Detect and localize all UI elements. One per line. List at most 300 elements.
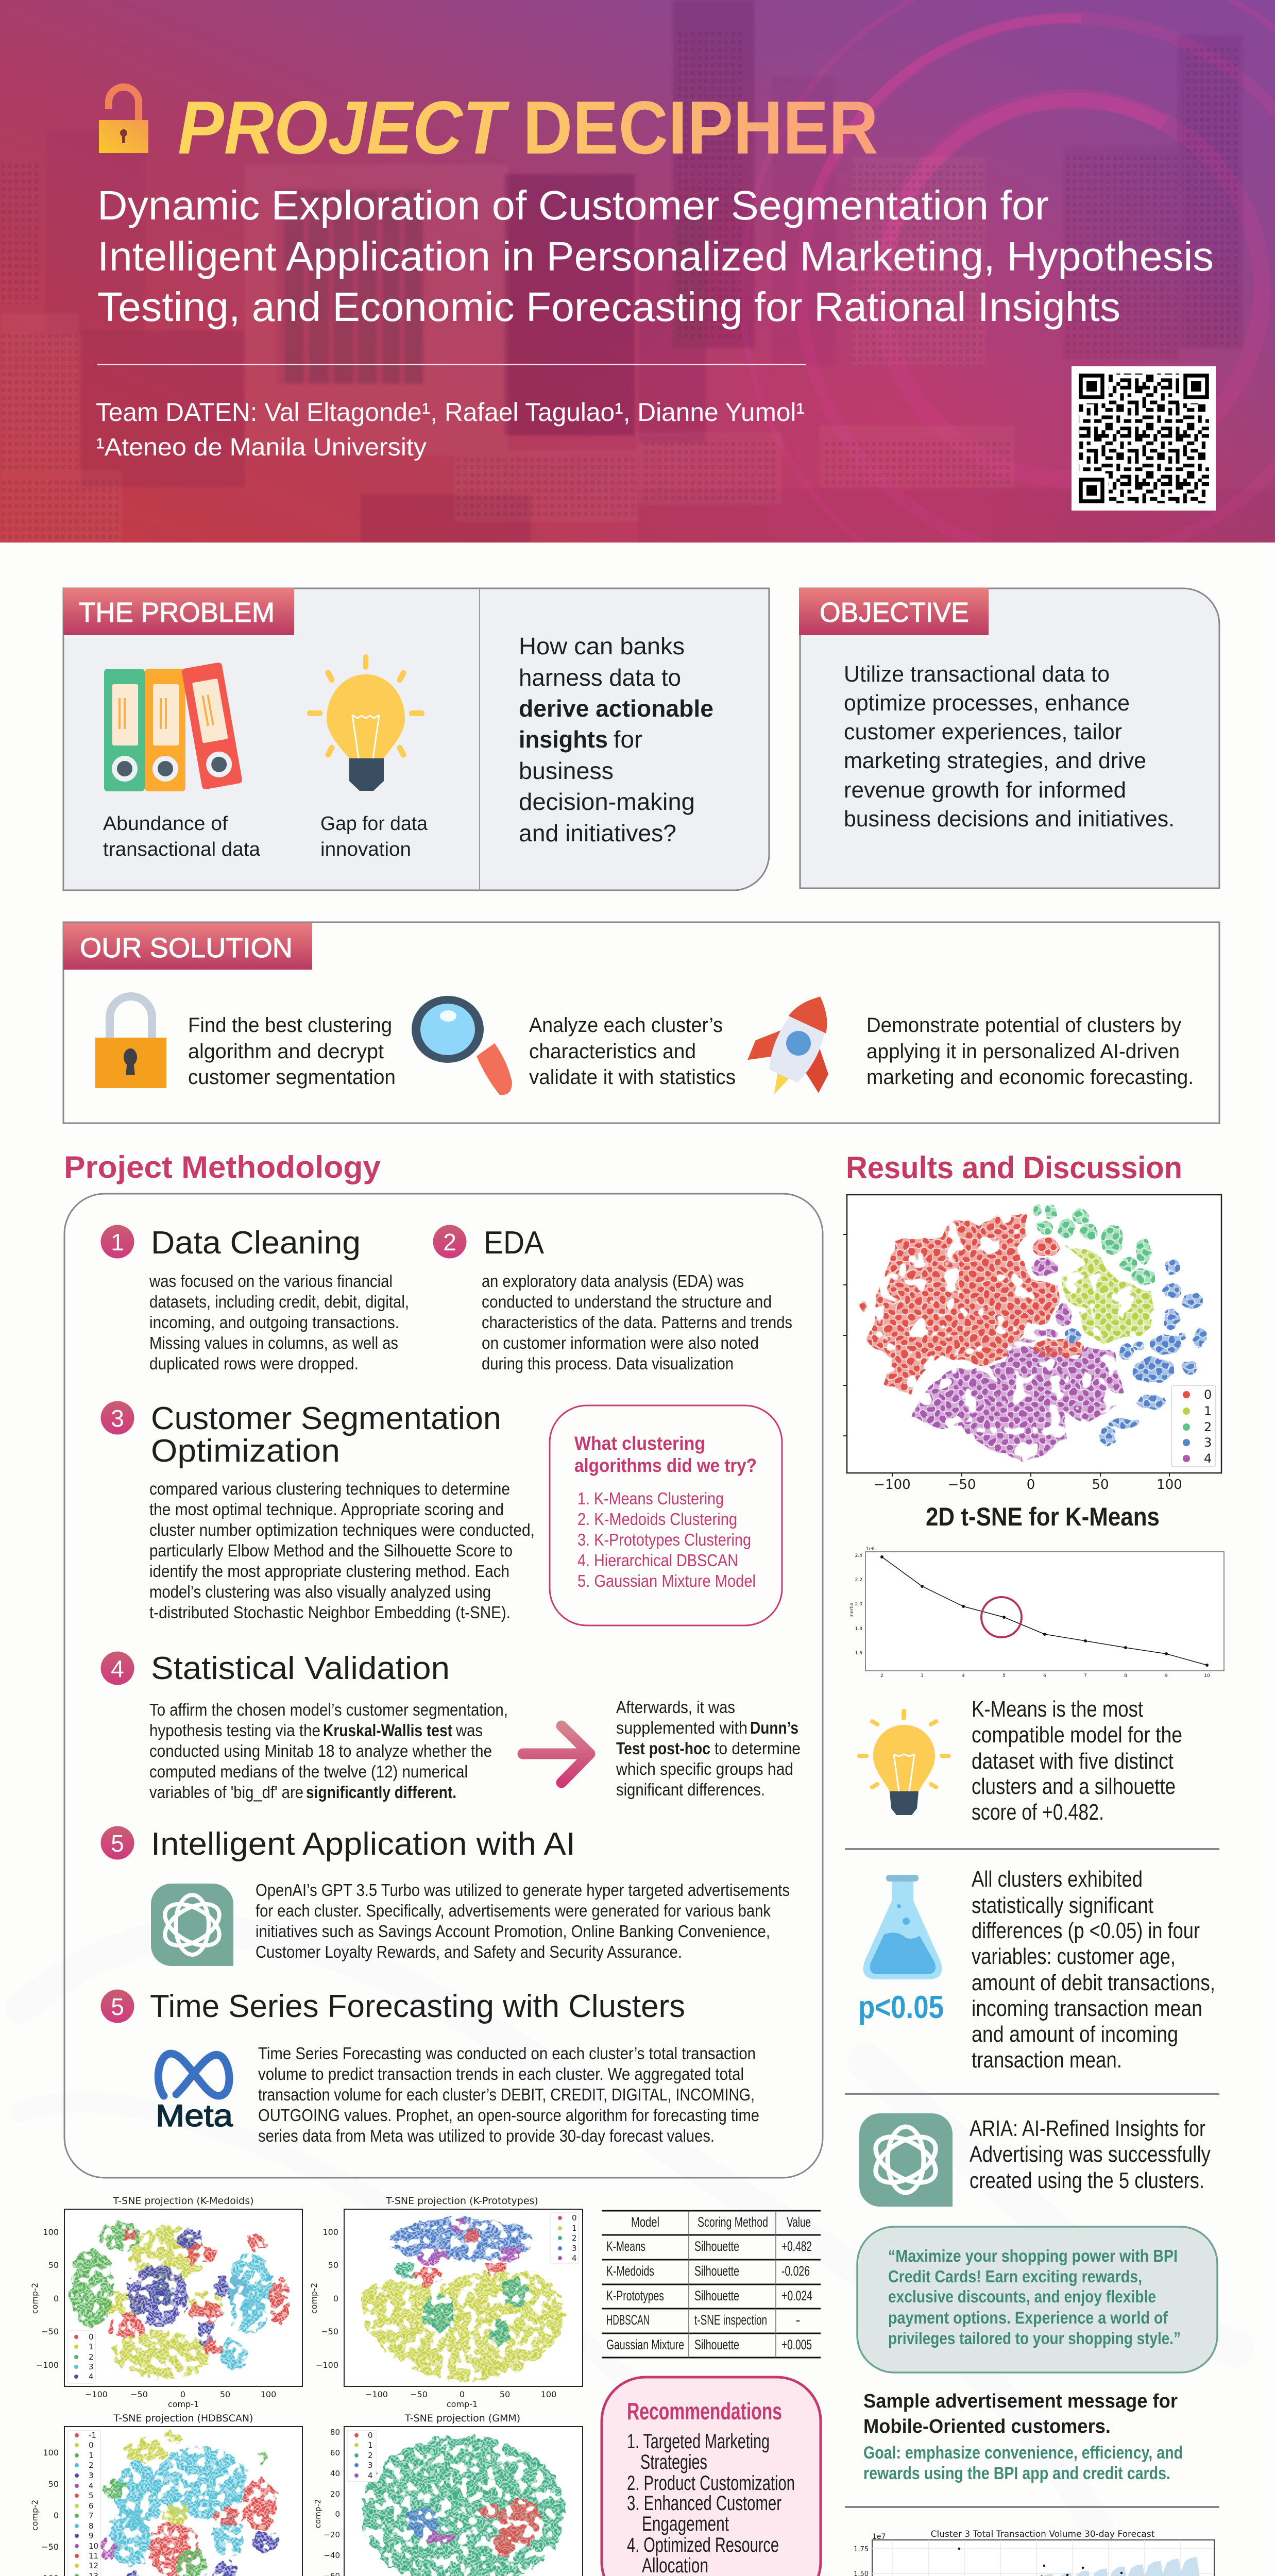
chart: t-SNE HDBSCAN: 0	[89, 2441, 94, 2450]
step 5b: time series forecasting: transaction volume for each cluster’s DEBIT, CREDIT, DIGITAL, INCOMING,	[258, 2085, 755, 2104]
chart: elbow plot: 4	[962, 1673, 965, 1679]
table: scoring: +0.005	[781, 2337, 812, 2352]
text: sample caption: Sample advertisement message for	[863, 2391, 1178, 2412]
chart: main t-SNE K-Means	[843, 1195, 1221, 1493]
chart: t-SNE HDBSCAN: T-SNE projection (HDBSCAN)	[113, 2413, 253, 2424]
chart: t-SNE K-Medoids: comp-2	[30, 2283, 40, 2314]
problem question: insights	[519, 726, 608, 753]
step 4: statistical validation: Statistical Validation	[151, 1651, 450, 1686]
step 3: customer segmentation optimization: the most optimal technique. Appropriate scoring and	[149, 1500, 504, 1519]
step 2: EDA: during this process. Data visualization	[482, 1354, 734, 1373]
callout: clustering algorithms: 5. Gaussian Mixture Model	[577, 1571, 756, 1590]
chart: t-SNE K-Medoids: T-SNE projection (K-Medoids)	[112, 2195, 254, 2207]
subtitle: Intelligent Application in Personalized Marketing, Hypothesis	[97, 233, 1214, 279]
problem question: derive actionable	[519, 695, 713, 722]
heading: results and discussion: Results and Discussion	[846, 1150, 1182, 1185]
post-hoc text	[616, 1698, 801, 1799]
chart: t-SNE K-Medoids: 0	[54, 2294, 59, 2303]
chart: t-SNE GMM: 3	[368, 2461, 373, 2470]
chart: t-SNE K-Prototypes: 50	[328, 2260, 338, 2270]
chart: main t-SNE K-Means: 1	[1204, 1404, 1212, 1418]
text: sample caption: Mobile-Oriented customers.	[863, 2416, 1111, 2437]
captions: Abundance of	[103, 813, 228, 835]
problem question	[519, 633, 713, 846]
chart: forecast: Cluster 3 Total Transaction Volume 30-day Forecast	[931, 2529, 1155, 2539]
step 1: data cleaning	[101, 1225, 409, 1373]
solution text 1: Find the best clustering	[188, 1014, 392, 1037]
chart: t-SNE K-Prototypes: −50	[410, 2389, 428, 2399]
panel: our solution	[63, 922, 1219, 1123]
title: DECIPHER	[523, 86, 878, 170]
tab heading: OUR SOLUTION	[80, 933, 293, 963]
chart: elbow plot: 10	[1204, 1673, 1210, 1679]
text: sample caption	[863, 2391, 1183, 2483]
subtitle: Dynamic Exploration of Customer Segmentation for	[97, 182, 1049, 228]
icon: magnifier	[412, 996, 512, 1095]
captions: Gap for data	[320, 813, 428, 835]
stat: p<0.05: p<0.05	[858, 1990, 944, 2025]
callout: sample advertisement: payment options. Experience a world of	[888, 2308, 1168, 2327]
chart: t-SNE K-Medoids: −50	[130, 2389, 148, 2399]
step 5b: time series forecasting: series data from Meta was utilized to provide 30-day forecast values.	[258, 2126, 715, 2145]
chart: main t-SNE K-Means: −50	[948, 1477, 976, 1493]
step 2: EDA: an exploratory data analysis (EDA) was	[482, 1272, 744, 1291]
chart: t-SNE K-Prototypes: 1	[572, 2224, 577, 2233]
panel: recommendations: Recommendations	[627, 2398, 782, 2425]
tab heading: OBJECTIVE	[820, 597, 969, 628]
step 4: statistical validation: significantly different.	[306, 1783, 456, 1802]
table: scoring: Silhouette	[694, 2337, 739, 2352]
solution text 2	[529, 1014, 736, 1089]
step 2: EDA: 2	[443, 1229, 456, 1256]
step 1: data cleaning: Data Cleaning	[151, 1225, 361, 1261]
chart: t-SNE K-Medoids: −50	[41, 2327, 59, 2336]
step 1: data cleaning: incoming, and outgoing transactions.	[149, 1313, 399, 1332]
step 5: intelligent application with AI: OpenAI’s GPT 3.5 Turbo was utilized to generate hyper targeted advertisements	[256, 1880, 790, 1900]
chart: t-SNE K-Prototypes: comp-2	[309, 2283, 319, 2314]
subtitle: Testing, and Economic Forecasting for Rational Insights	[97, 284, 1120, 330]
chart: elbow plot: 9	[1165, 1673, 1168, 1679]
chart: t-SNE K-Medoids: 50	[48, 2260, 59, 2270]
table: scoring: Silhouette	[694, 2263, 739, 2279]
problem question: harness data to	[519, 664, 681, 691]
chart: t-SNE GMM: −40	[324, 2551, 340, 2560]
chart: t-SNE K-Prototypes: 0	[572, 2213, 577, 2223]
chart: elbow plot: 5	[1002, 1673, 1006, 1679]
step 5b: time series forecasting	[101, 1989, 759, 2145]
callout: sample advertisement	[857, 2227, 1217, 2372]
captions	[103, 813, 428, 860]
chart: t-SNE HDBSCAN	[30, 2413, 302, 2576]
chart: elbow plot: inertia	[849, 1602, 855, 1618]
chart: main t-SNE K-Means: 3	[1204, 1435, 1212, 1450]
post-hoc text: supplemented with	[616, 1718, 747, 1737]
callout: sample advertisement: Credit Cards! Earn exciting rewards,	[888, 2267, 1142, 2286]
panel: recommendations: 1. Targeted Marketing	[627, 2430, 770, 2453]
solution text 1: algorithm and decrypt	[188, 1040, 384, 1063]
subtitle	[97, 182, 1214, 330]
text: statistical finding: variables: customer age,	[972, 1944, 1176, 1969]
tab heading	[63, 588, 294, 635]
chart: t-SNE K-Medoids: 0	[89, 2332, 94, 2342]
objective text	[844, 662, 1175, 832]
chart: t-SNE GMM	[313, 2413, 583, 2576]
step 2: EDA: characteristics of the data. Patterns and trends	[482, 1313, 792, 1332]
table: scoring: Model	[631, 2214, 659, 2230]
step 5: intelligent application with AI: Customer Loyalty Rewards, and Safety and Security Assurance.	[256, 1942, 682, 1961]
solution text 3: marketing and economic forecasting.	[866, 1066, 1194, 1089]
step 1: data cleaning: Missing values in columns, as well as	[149, 1333, 398, 1352]
panel: recommendations: 4. Optimized Resource	[627, 2534, 779, 2556]
solution text 3: Demonstrate potential of clusters by	[866, 1014, 1181, 1037]
chart: t-SNE GMM: −20	[324, 2530, 340, 2539]
chart: t-SNE K-Medoids	[30, 2195, 302, 2409]
chart: forecast	[848, 2529, 1214, 2576]
icon: Meta logo: Meta	[156, 2098, 233, 2133]
chart: t-SNE K-Prototypes: 4	[572, 2253, 577, 2263]
chart: t-SNE K-Prototypes: −50	[321, 2327, 338, 2336]
chart: t-SNE K-Prototypes: −100	[316, 2360, 338, 2370]
text: K-Means finding: score of +0.482.	[972, 1800, 1104, 1825]
chart: t-SNE HDBSCAN: 5	[89, 2491, 94, 2500]
text: statistical finding: amount of debit transactions,	[972, 1970, 1215, 1995]
tab heading	[63, 923, 312, 970]
icon: Meta logo	[156, 2054, 233, 2133]
step 4: statistical validation: 4	[111, 1655, 124, 1682]
text: K-Means finding: clusters and a silhouette	[972, 1774, 1176, 1799]
callout: clustering algorithms: 3. K-Prototypes Clustering	[577, 1530, 751, 1549]
panel: recommendations	[602, 2377, 821, 2576]
chart: main t-SNE K-Means: 4	[1204, 1451, 1212, 1466]
solution text 3: applying it in personalized AI-driven	[866, 1040, 1180, 1063]
chart: t-SNE K-Prototypes: −100	[365, 2389, 388, 2399]
chart: t-SNE K-Prototypes: 50	[500, 2389, 510, 2399]
step 3: customer segmentation optimization: Optimization	[151, 1433, 340, 1469]
chart: elbow plot: 2	[880, 1673, 883, 1679]
problem question: and initiatives?	[519, 820, 676, 846]
text: K-Means finding	[972, 1697, 1182, 1825]
text: sample caption: Goal: emphasize convenience, efficiency, and	[863, 2443, 1183, 2463]
chart: t-SNE K-Medoids: −100	[85, 2389, 108, 2399]
callout: sample advertisement: exclusive discounts, and enjoy flexible	[888, 2287, 1156, 2306]
callout: sample advertisement: “Maximize your shopping power with BPI	[888, 2246, 1178, 2265]
chart: t-SNE HDBSCAN: −50	[41, 2542, 59, 2552]
step 3: customer segmentation optimization: compared various clustering techniques to determine	[149, 1479, 510, 1498]
panel: methodology	[64, 1194, 823, 2178]
step 3: customer segmentation optimization: identify the most appropriate clustering method. Each	[149, 1562, 509, 1581]
chart: elbow plot: 2.2	[855, 1578, 862, 1583]
text: sample caption: rewards using the BPI app and credit cards.	[863, 2464, 1170, 2483]
chart: t-SNE HDBSCAN: 9	[89, 2531, 94, 2540]
table: scoring: Silhouette	[694, 2288, 739, 2303]
chart: t-SNE K-Prototypes: 0	[460, 2389, 465, 2399]
tab heading	[799, 588, 989, 635]
text: K-Means finding: compatible model for the	[972, 1722, 1182, 1748]
icon: binders	[104, 662, 243, 791]
chart: t-SNE K-Medoids: 3	[89, 2362, 94, 2371]
chart: t-SNE K-Prototypes: 100	[541, 2389, 556, 2399]
chart: t-SNE K-Prototypes: 0	[333, 2294, 338, 2303]
step 4: statistical validation: Kruskal-Wallis test	[323, 1721, 452, 1740]
chart: elbow plot: 2.0	[855, 1602, 862, 1607]
post-hoc text: Dunn’s	[750, 1718, 798, 1737]
callout: clustering algorithms	[550, 1405, 782, 1625]
chart: t-SNE GMM: 60	[330, 2448, 340, 2458]
chart: t-SNE K-Medoids: 0	[180, 2389, 185, 2399]
objective text: Utilize transactional data to	[844, 662, 1110, 687]
step 2: EDA: on customer information were also noted	[482, 1333, 759, 1352]
callout: sample advertisement: privileges tailored to your shopping style.”	[888, 2329, 1181, 2348]
step 1: data cleaning: datasets, including credit, debit, digital,	[149, 1292, 409, 1311]
hero banner	[0, 0, 1275, 543]
panel: objective	[799, 588, 1219, 888]
chart: elbow plot: 1.8	[855, 1626, 862, 1632]
post-hoc text: significant differences.	[616, 1780, 765, 1799]
table: scoring: t-SNE inspection	[694, 2312, 767, 2328]
icon: padlock	[95, 996, 166, 1088]
chart: t-SNE K-Medoids: 4	[89, 2372, 94, 2381]
chart: main t-SNE K-Means: 50	[1092, 1477, 1109, 1493]
icon: ChatGPT logo	[859, 2113, 953, 2207]
step 5: intelligent application with AI: initiatives such as Savings Account Promotion, Online Banking Convenience,	[256, 1922, 770, 1941]
chart: t-SNE HDBSCAN: 6	[89, 2501, 94, 2511]
text: ARIA: ARIA: AI-Refined Insights for	[970, 2116, 1205, 2141]
text: statistical finding: statistically significant	[972, 1893, 1153, 1918]
step 1: data cleaning: was focused on the various financial	[149, 1272, 393, 1291]
callout: clustering algorithms: What clustering	[574, 1433, 705, 1454]
solution text 1: customer segmentation	[188, 1066, 396, 1089]
chart: elbow plot: 6	[1043, 1673, 1046, 1679]
callout: clustering algorithms: 4. Hierarchical DBSCAN	[577, 1551, 738, 1570]
authors: Team DATEN: Val Eltagonde¹, Rafael Tagulao¹, Dianne Yumol¹	[96, 398, 805, 427]
chart: t-SNE GMM: 0	[335, 2510, 340, 2519]
text: statistical finding: All clusters exhibited	[972, 1867, 1143, 1892]
chart: main t-SNE K-Means: 2	[1204, 1420, 1212, 1434]
step 4: statistical validation: was	[455, 1721, 483, 1740]
title: PROJECT	[178, 86, 510, 170]
caption: 2D t-SNE: 2D t-SNE for K-Means	[926, 1502, 1160, 1531]
text: ARIA	[970, 2116, 1211, 2193]
chart: t-SNE GMM: 20	[330, 2489, 340, 2499]
icon: open padlock	[99, 87, 148, 153]
panel: the problem	[63, 587, 769, 890]
QR code	[1072, 366, 1216, 511]
solution text 2: characteristics and	[529, 1040, 696, 1063]
icon: flask	[863, 1875, 942, 1979]
step 5: intelligent application with AI: Intelligent Application with AI	[151, 1826, 575, 1862]
chart: t-SNE HDBSCAN: 0	[54, 2511, 59, 2520]
post-hoc text: Afterwards, it was	[616, 1698, 735, 1717]
step 4: statistical validation: conducted using Minitab 18 to analyze whether the	[149, 1741, 492, 1760]
step 3: customer segmentation optimization: 3	[111, 1405, 124, 1432]
chart: elbow plot: 1e6	[866, 1547, 875, 1552]
authors	[96, 398, 805, 461]
text: K-Means finding: dataset with five distinct	[972, 1749, 1174, 1774]
step 4: statistical validation	[101, 1651, 508, 1802]
chart: t-SNE GMM: 40	[330, 2469, 340, 2478]
chart: t-SNE GMM: 2	[368, 2451, 373, 2460]
step 5b: time series forecasting: 5	[111, 1993, 124, 2020]
chart: t-SNE K-Prototypes: comp-1	[447, 2399, 478, 2409]
chart: t-SNE GMM: 0	[368, 2431, 373, 2440]
solution text 3	[866, 1014, 1194, 1089]
solution text 1	[188, 1014, 396, 1089]
objective text: customer experiences, tailor	[844, 719, 1122, 744]
step 5: intelligent application with AI: 5	[111, 1830, 124, 1857]
step 2: EDA: conducted to understand the structure and	[482, 1292, 772, 1311]
text: statistical finding: incoming transaction mean	[972, 1996, 1202, 2021]
chart: t-SNE HDBSCAN: 1	[89, 2451, 94, 2460]
chart: main t-SNE K-Means: −100	[874, 1477, 911, 1493]
table: scoring	[602, 2211, 821, 2358]
chart: t-SNE GMM: 1	[368, 2441, 373, 2450]
panel: recommendations: Strategies	[640, 2451, 707, 2473]
chart: t-SNE HDBSCAN: 2	[89, 2461, 94, 2470]
table: scoring: Scoring Method	[698, 2214, 768, 2230]
solution text 2: validate it with statistics	[529, 1066, 736, 1089]
text: ARIA: Advertising was successfully	[970, 2142, 1211, 2167]
table: scoring: +0.482	[781, 2239, 812, 2254]
tab heading: THE PROBLEM	[79, 597, 275, 628]
table: scoring: K-Medoids	[606, 2263, 654, 2279]
table: scoring: -	[795, 2312, 801, 2328]
objective text: optimize processes, enhance	[844, 690, 1130, 716]
chart: main t-SNE K-Means: 100	[1157, 1477, 1182, 1493]
chart: elbow plot: 3	[921, 1673, 924, 1679]
text: K-Means finding: K-Means is the most	[972, 1697, 1143, 1722]
objective text: revenue growth for informed	[844, 777, 1126, 803]
table: scoring: Value	[787, 2214, 811, 2230]
text: statistical finding: differences (p <0.05) in four	[972, 1918, 1200, 1943]
post-hoc text: which specific groups had	[616, 1759, 793, 1778]
step 3: customer segmentation optimization	[101, 1401, 535, 1622]
title	[179, 101, 877, 155]
problem question: How can banks	[519, 633, 685, 659]
chart: t-SNE GMM: 80	[330, 2428, 340, 2437]
chart: t-SNE HDBSCAN: comp-2	[30, 2500, 40, 2531]
chart: t-SNE K-Medoids: −100	[36, 2360, 59, 2370]
step 5: intelligent application with AI	[101, 1826, 790, 1966]
step 5b: time series forecasting: Time Series Forecasting with Clusters	[150, 1989, 685, 2024]
step 2: EDA	[433, 1225, 792, 1373]
table: scoring: Silhouette	[694, 2239, 739, 2254]
chart: t-SNE HDBSCAN: 8	[89, 2521, 94, 2531]
step 1: data cleaning: 1	[111, 1229, 124, 1256]
step 1: data cleaning: duplicated rows were dropped.	[149, 1354, 359, 1373]
chart: elbow plot: 8	[1124, 1673, 1127, 1679]
step 3: customer segmentation optimization: cluster number optimization techniques were conducted,	[149, 1520, 535, 1539]
callout: clustering algorithms: 2. K-Medoids Clustering	[577, 1510, 737, 1529]
chart: t-SNE HDBSCAN: 4	[89, 2481, 94, 2490]
step 3: customer segmentation optimization: t-distributed Stochastic Neighbor Embedding (t-SNE).	[149, 1603, 511, 1622]
chart: t-SNE HDBSCAN: 10	[89, 2541, 98, 2551]
text: ARIA: created using the 5 clusters.	[970, 2168, 1204, 2193]
captions: innovation	[320, 839, 411, 860]
chart: t-SNE K-Medoids: 1	[89, 2342, 94, 2351]
post-hoc text: Test post-hoc	[616, 1739, 710, 1758]
chart: elbow plot: 7	[1084, 1673, 1087, 1679]
chart: t-SNE HDBSCAN: 11	[89, 2551, 98, 2561]
chart: elbow plot	[849, 1547, 1224, 1679]
chart: t-SNE K-Prototypes: T-SNE projection (K-Prototypes)	[385, 2195, 538, 2207]
icon: light bulb	[857, 1709, 951, 1815]
step 4: statistical validation: computed medians of the twelve (12) numerical	[149, 1762, 468, 1781]
chart: t-SNE GMM: comp-2	[313, 2499, 322, 2528]
icon: ChatGPT logo	[151, 1884, 233, 1966]
chart: t-SNE K-Prototypes: 3	[572, 2244, 577, 2253]
chart: t-SNE HDBSCAN: -1	[89, 2431, 96, 2440]
chart: t-SNE HDBSCAN: 3	[89, 2471, 94, 2480]
panel: recommendations: Engagement	[642, 2513, 729, 2535]
problem question: decision-making	[519, 788, 695, 815]
problem question: for	[614, 726, 642, 753]
objective text: business decisions and initiatives.	[844, 806, 1175, 832]
text: statistical finding: transaction mean.	[972, 2047, 1122, 2073]
chart: t-SNE HDBSCAN: 12	[89, 2561, 98, 2570]
chart: t-SNE K-Medoids: comp-1	[168, 2399, 199, 2409]
chart: t-SNE K-Medoids: 100	[43, 2227, 59, 2237]
icon: light bulb	[307, 654, 424, 791]
arrow	[523, 1726, 590, 1783]
problem question: business	[519, 757, 614, 784]
table: scoring: +0.024	[781, 2288, 812, 2303]
callout: clustering algorithms: algorithms did we try?	[574, 1455, 757, 1476]
chart: t-SNE HDBSCAN: 50	[48, 2479, 59, 2489]
chart: forecast: 1e7	[872, 2533, 886, 2541]
solution text 2: Analyze each cluster’s	[529, 1014, 723, 1037]
chart: t-SNE GMM: 4	[368, 2471, 373, 2480]
table: scoring: K-Means	[606, 2239, 645, 2254]
chart: t-SNE HDBSCAN: 7	[89, 2511, 94, 2520]
chart: t-SNE K-Medoids: 2	[89, 2352, 94, 2362]
table: scoring: Gaussian Mixture	[606, 2337, 684, 2352]
captions: transactional data	[103, 839, 261, 860]
chart: t-SNE K-Prototypes: 2	[572, 2233, 577, 2243]
chart: t-SNE K-Medoids: 100	[261, 2389, 276, 2399]
text: statistical finding	[972, 1867, 1215, 2073]
chart: main t-SNE K-Means: 0	[1204, 1387, 1212, 1402]
step 5: intelligent application with AI: for each cluster. Specifically, advertisements were generated for various bank	[256, 1901, 771, 1920]
panel: recommendations: 2. Product Customization	[627, 2472, 795, 2495]
step 5b: time series forecasting: volume to predict transaction trends in each cluster. We aggregated total	[258, 2064, 744, 2083]
step 4: statistical validation: hypothesis testing via the	[149, 1721, 320, 1740]
icon: rocket	[738, 979, 857, 1112]
chart: elbow plot: 1.6	[855, 1651, 862, 1656]
chart: t-SNE K-Medoids: 50	[220, 2389, 230, 2399]
step 5b: time series forecasting: Time Series Forecasting was conducted on each cluster’s total transaction	[258, 2044, 756, 2063]
chart: t-SNE K-Prototypes: 100	[322, 2227, 338, 2237]
table: scoring: HDBSCAN	[606, 2312, 650, 2328]
heading: project methodology: Project Methodology	[64, 1150, 381, 1184]
chart: forecast: 1.75	[854, 2546, 869, 2553]
step 3: customer segmentation optimization: model’s clustering was also visually analyzed using	[149, 1582, 491, 1601]
authors: ¹Ateneo de Manila University	[96, 434, 427, 461]
chart: t-SNE HDBSCAN: 100	[43, 2448, 59, 2458]
step 5b: time series forecasting: OUTGOING values. Prophet, an open-source algorithm for forecasting time	[258, 2106, 759, 2125]
table: scoring: K-Prototypes	[606, 2288, 664, 2303]
text: statistical finding: and amount of incoming	[972, 2022, 1178, 2047]
table: scoring: -0.026	[781, 2263, 810, 2279]
chart: t-SNE K-Prototypes	[309, 2195, 583, 2409]
step 4: statistical validation: variables of 'big_df' are	[149, 1783, 303, 1802]
step 2: EDA: EDA	[484, 1225, 545, 1261]
chart: elbow plot: 2.4	[855, 1553, 862, 1558]
panel: recommendations: 3. Enhanced Customer	[627, 2492, 781, 2515]
step 3: customer segmentation optimization: Customer Segmentation	[151, 1401, 501, 1436]
chart: t-SNE GMM: T-SNE projection (GMM)	[404, 2413, 520, 2424]
chart: main t-SNE K-Means: 0	[1027, 1477, 1035, 1493]
callout: clustering algorithms: 1. K-Means Clustering	[577, 1489, 724, 1508]
